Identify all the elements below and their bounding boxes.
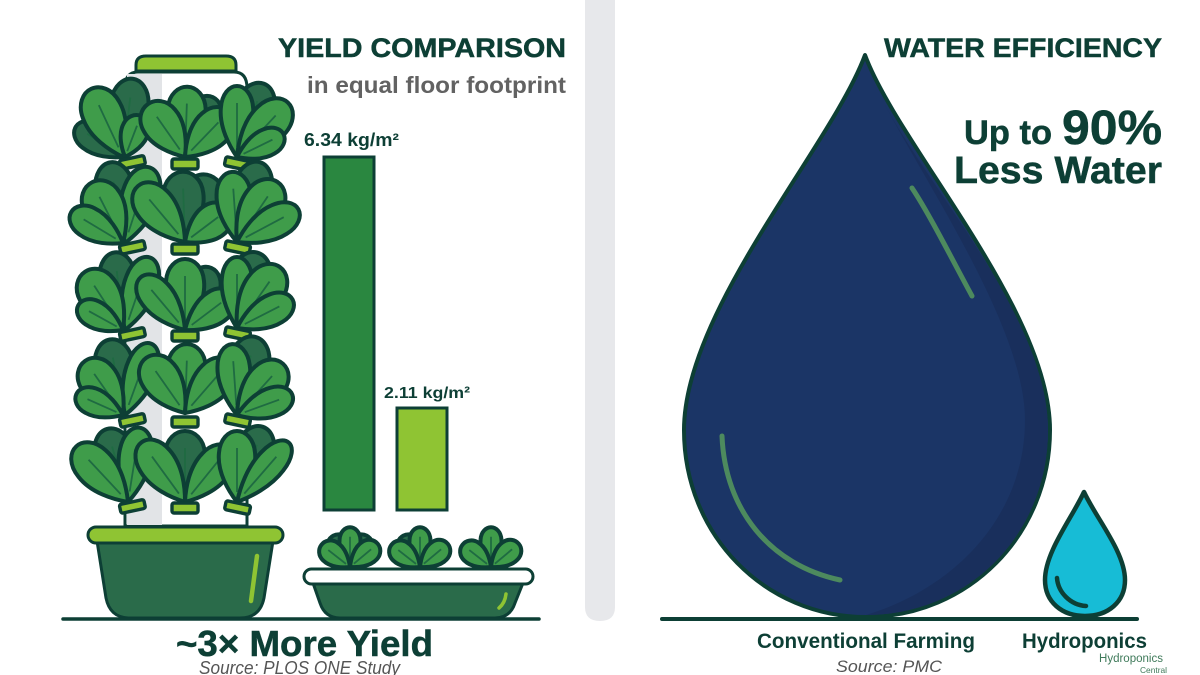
bar: conventional value label: 2.11 kg/m² [384, 385, 470, 402]
small drop: hydroponics [1045, 492, 1125, 616]
drop upper highlight [912, 188, 972, 296]
vertical tower illustration [62, 56, 306, 618]
ground line left [63, 617, 539, 621]
plant row 2 [63, 157, 306, 256]
tray body [313, 583, 523, 618]
callout: less water: Less Water [954, 150, 1162, 192]
watermark [1099, 653, 1167, 675]
bar: vertical farming value label: 6.34 kg/m² [304, 130, 399, 150]
small plants [314, 527, 526, 576]
tower column [125, 72, 247, 526]
plant row 3 [68, 247, 300, 343]
heading: yield comparison: YIELD COMPARISON [278, 33, 566, 63]
bar: vertical farming [324, 157, 374, 510]
large drop: conventional farming [684, 55, 1050, 617]
plant row 5 [62, 421, 300, 515]
tower shaded strip [127, 74, 162, 525]
bar chart: yield [304, 130, 470, 510]
plant row 4 [69, 332, 297, 429]
tray highlight [499, 594, 506, 608]
drop shaded crescent [866, 105, 1048, 615]
watermark word two: Central [1140, 665, 1167, 675]
bar: conventional [397, 408, 447, 510]
tower pot rim [88, 527, 283, 543]
callout: more yield: ~3× More Yield [176, 623, 433, 664]
callout: up to: Up to [964, 114, 1052, 152]
drop body [684, 55, 1050, 617]
tower pot body [97, 541, 273, 618]
tray rim [304, 569, 533, 584]
tower pot highlight [251, 556, 257, 601]
callout: 90%: 90% [1062, 102, 1162, 155]
panel: yield comparison [62, 33, 566, 675]
panel: water efficiency [662, 33, 1167, 675]
subheading: floor footprint: in equal floor footprint [307, 72, 566, 98]
label: hydroponics: Hydroponics [1022, 630, 1147, 653]
ground line right [662, 617, 1137, 621]
small drop body [1045, 492, 1125, 616]
small drop highlight [1057, 578, 1086, 606]
watermark word one: Hydroponics [1099, 653, 1163, 665]
center divider [585, 0, 615, 621]
plant row 1 [68, 76, 302, 171]
heading: water efficiency: WATER EFFICIENCY [884, 33, 1162, 63]
tower cap [136, 56, 236, 71]
drop lower highlight [722, 436, 840, 580]
label: conventional farming: Conventional Farming [757, 630, 975, 653]
horizontal tray with small plants [304, 527, 533, 618]
